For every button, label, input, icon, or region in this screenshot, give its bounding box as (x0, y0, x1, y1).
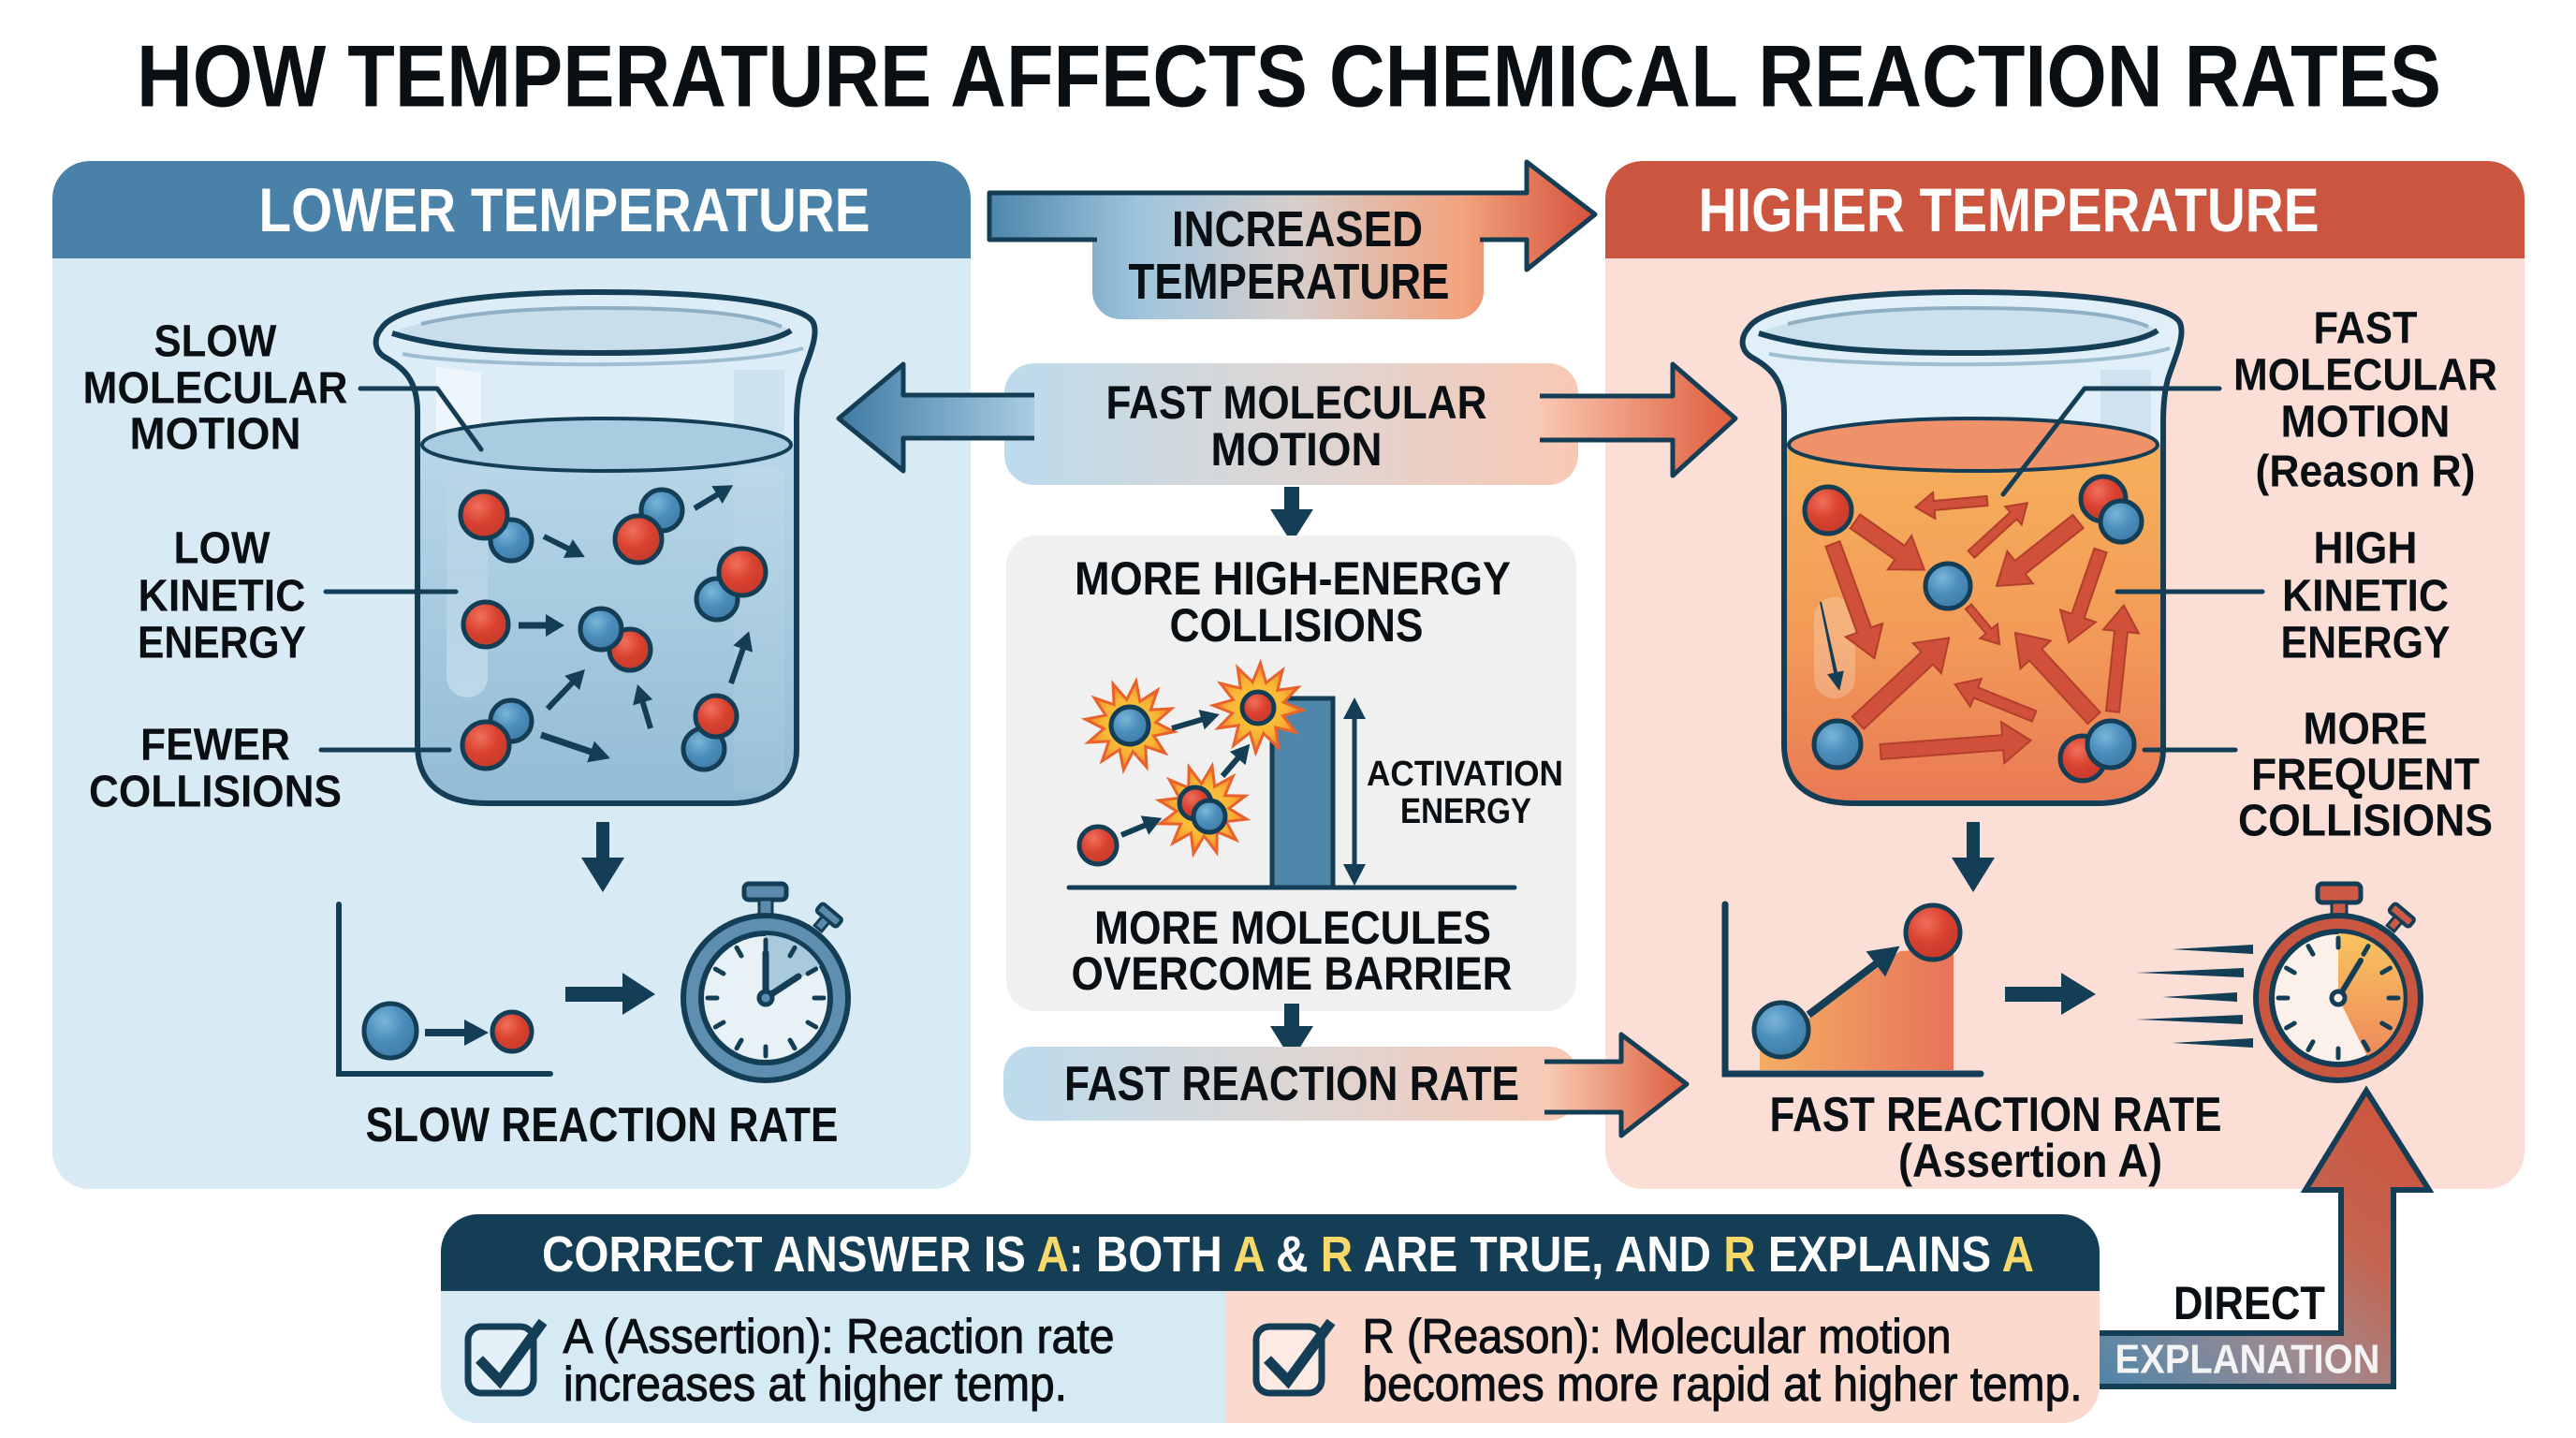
arrow: to higher temperature beaker (1540, 364, 1735, 476)
text: assertion: A (Assertion): Reaction rate (564, 1310, 1114, 1364)
label: high kinetic energy: ENERGY (2280, 618, 2451, 668)
collision molecules (1079, 692, 1274, 864)
label: fast reaction rate (assertion a) (1769, 1088, 2222, 1187)
icon: speed lines (2136, 945, 2253, 1048)
label: slow molecular motion: MOTION (129, 410, 301, 459)
label: more frequent collisions: COLLISIONS (2238, 796, 2493, 846)
label: fast molecular motion (reason r) (2003, 303, 2497, 496)
label: more frequent collisions: MORE (2303, 704, 2428, 755)
panel: higher temperature (1605, 161, 2525, 1189)
text: reason: R (Reason): Molecular motion (1363, 1310, 1951, 1364)
heading: higher temperature: HIGHER TEMPERATURE (1698, 175, 2320, 244)
label: activation energy: ACTIVATION (1367, 755, 1563, 794)
label: fast reaction rate (assertion a): (Assertion A) (1898, 1135, 2162, 1187)
label: explanation: EXPLANATION (2115, 1337, 2379, 1382)
label: increased temperature (1129, 201, 1449, 310)
label: more molecules overcome barrier (1071, 902, 1513, 1000)
label: fewer collisions: COLLISIONS (89, 768, 342, 816)
label: fewer collisions (89, 721, 449, 816)
chart: fast reaction (1725, 904, 1981, 1074)
heading: more high-energy collisions: COLLISIONS (1170, 599, 1423, 652)
beaker: cool water (376, 292, 815, 803)
label: high kinetic energy: HIGH (2314, 524, 2417, 573)
label: slow molecular motion: MOLECULAR (82, 363, 348, 414)
panel: lower temperature (52, 161, 971, 1189)
activation energy arrow (1352, 712, 1357, 872)
label: fast molecular motion (reason r): FAST (2314, 303, 2417, 354)
label: fast reaction rate (assertion a): FAST REACTION RATE (1769, 1088, 2222, 1142)
label: increased temperature: TEMPERATURE (1129, 254, 1449, 310)
answer heading: CORRECT ANSWER IS A: BOTH A & R ARE TRUE, AND R EXPLAINS A (542, 1226, 2034, 1283)
arrow: beaker to slow rate (581, 822, 624, 892)
collision arrows (1118, 704, 1258, 844)
barrier (1272, 698, 1333, 888)
label: low kinetic energy (138, 524, 456, 668)
chart: slow reaction (339, 904, 550, 1074)
arrow: down to fast reaction rate (1270, 1004, 1313, 1061)
label: slow molecular motion: SLOW (154, 316, 277, 367)
molecules: slow moving (461, 490, 766, 770)
icon: slow stopwatch (683, 884, 848, 1080)
icon: fast stopwatch (2256, 884, 2421, 1080)
label: more molecules overcome barrier: MORE MOLECULES (1094, 902, 1491, 954)
molecules: fast moving (1805, 477, 2142, 781)
panel: correct answer (441, 1214, 2100, 1423)
box: fast molecular motion (1004, 363, 1578, 485)
label: fast molecular motion (reason r): MOTION (2280, 397, 2451, 448)
label: slow reaction rate: SLOW REACTION RATE (365, 1098, 839, 1152)
box: fast reaction rate: FAST REACTION RATE (1064, 1057, 1519, 1111)
label: more frequent collisions: FREQUENT (2251, 751, 2480, 800)
heading: more high-energy collisions (1075, 552, 1511, 652)
label: low kinetic energy: ENERGY (138, 618, 306, 668)
label: fast molecular motion (reason r): MOLECULAR (2233, 350, 2497, 401)
icon: check reason (1256, 1322, 1331, 1393)
arrow: beaker to fast rate (1952, 822, 1995, 892)
baseline (1069, 886, 1515, 889)
label: more frequent collisions (2144, 704, 2493, 846)
label: more molecules overcome barrier: OVERCOME BARRIER (1071, 947, 1513, 1000)
small motion arrows (519, 477, 759, 769)
arrow: to slow stopwatch (565, 973, 655, 1015)
box: fast molecular motion: MOTION (1211, 423, 1382, 476)
label: direct: DIRECT (2174, 1277, 2325, 1329)
arrow: to fast stopwatch (2005, 973, 2096, 1015)
heading: more high-energy collisions: MORE HIGH-ENERGY (1075, 552, 1511, 605)
arrow: down to collisions (1270, 487, 1313, 543)
label: low kinetic energy: LOW (174, 524, 271, 573)
heading: lower temperature: LOWER TEMPERATURE (258, 175, 871, 244)
arrow: to higher temperature rate (1544, 1034, 1687, 1136)
arrow: direct explanation (2100, 1091, 2429, 1387)
label: high kinetic energy (2117, 524, 2451, 668)
box: fast reaction rate (1003, 1047, 1577, 1121)
collision bursts (1079, 661, 1305, 863)
text: assertion (564, 1310, 1114, 1412)
fast motion arrows (1812, 488, 2142, 772)
arrow: to lower temperature beaker (839, 364, 1034, 471)
label: fewer collisions: FEWER (140, 721, 290, 770)
icon: check assertion (468, 1322, 543, 1393)
text: reason (1363, 1310, 2082, 1412)
label: low kinetic energy: KINETIC (139, 571, 305, 622)
label: increased temperature: INCREASED (1172, 201, 1423, 257)
label: activation energy: ENERGY (1400, 792, 1531, 831)
text: assertion: increases at higher temp. (564, 1357, 1067, 1412)
panel: high energy collisions (1006, 536, 1576, 1011)
label: slow molecular motion (82, 316, 481, 459)
increased temperature arrow (989, 162, 1595, 319)
label: high kinetic energy: KINETIC (2282, 571, 2449, 622)
label: activation energy (1367, 755, 1563, 831)
beaker: hot liquid (1743, 292, 2182, 803)
label: fast molecular motion (reason r): (Reason R) (2256, 448, 2475, 496)
box: fast molecular motion: FAST MOLECULAR (1106, 376, 1486, 429)
text: reason: becomes more rapid at higher temp. (1363, 1357, 2082, 1412)
